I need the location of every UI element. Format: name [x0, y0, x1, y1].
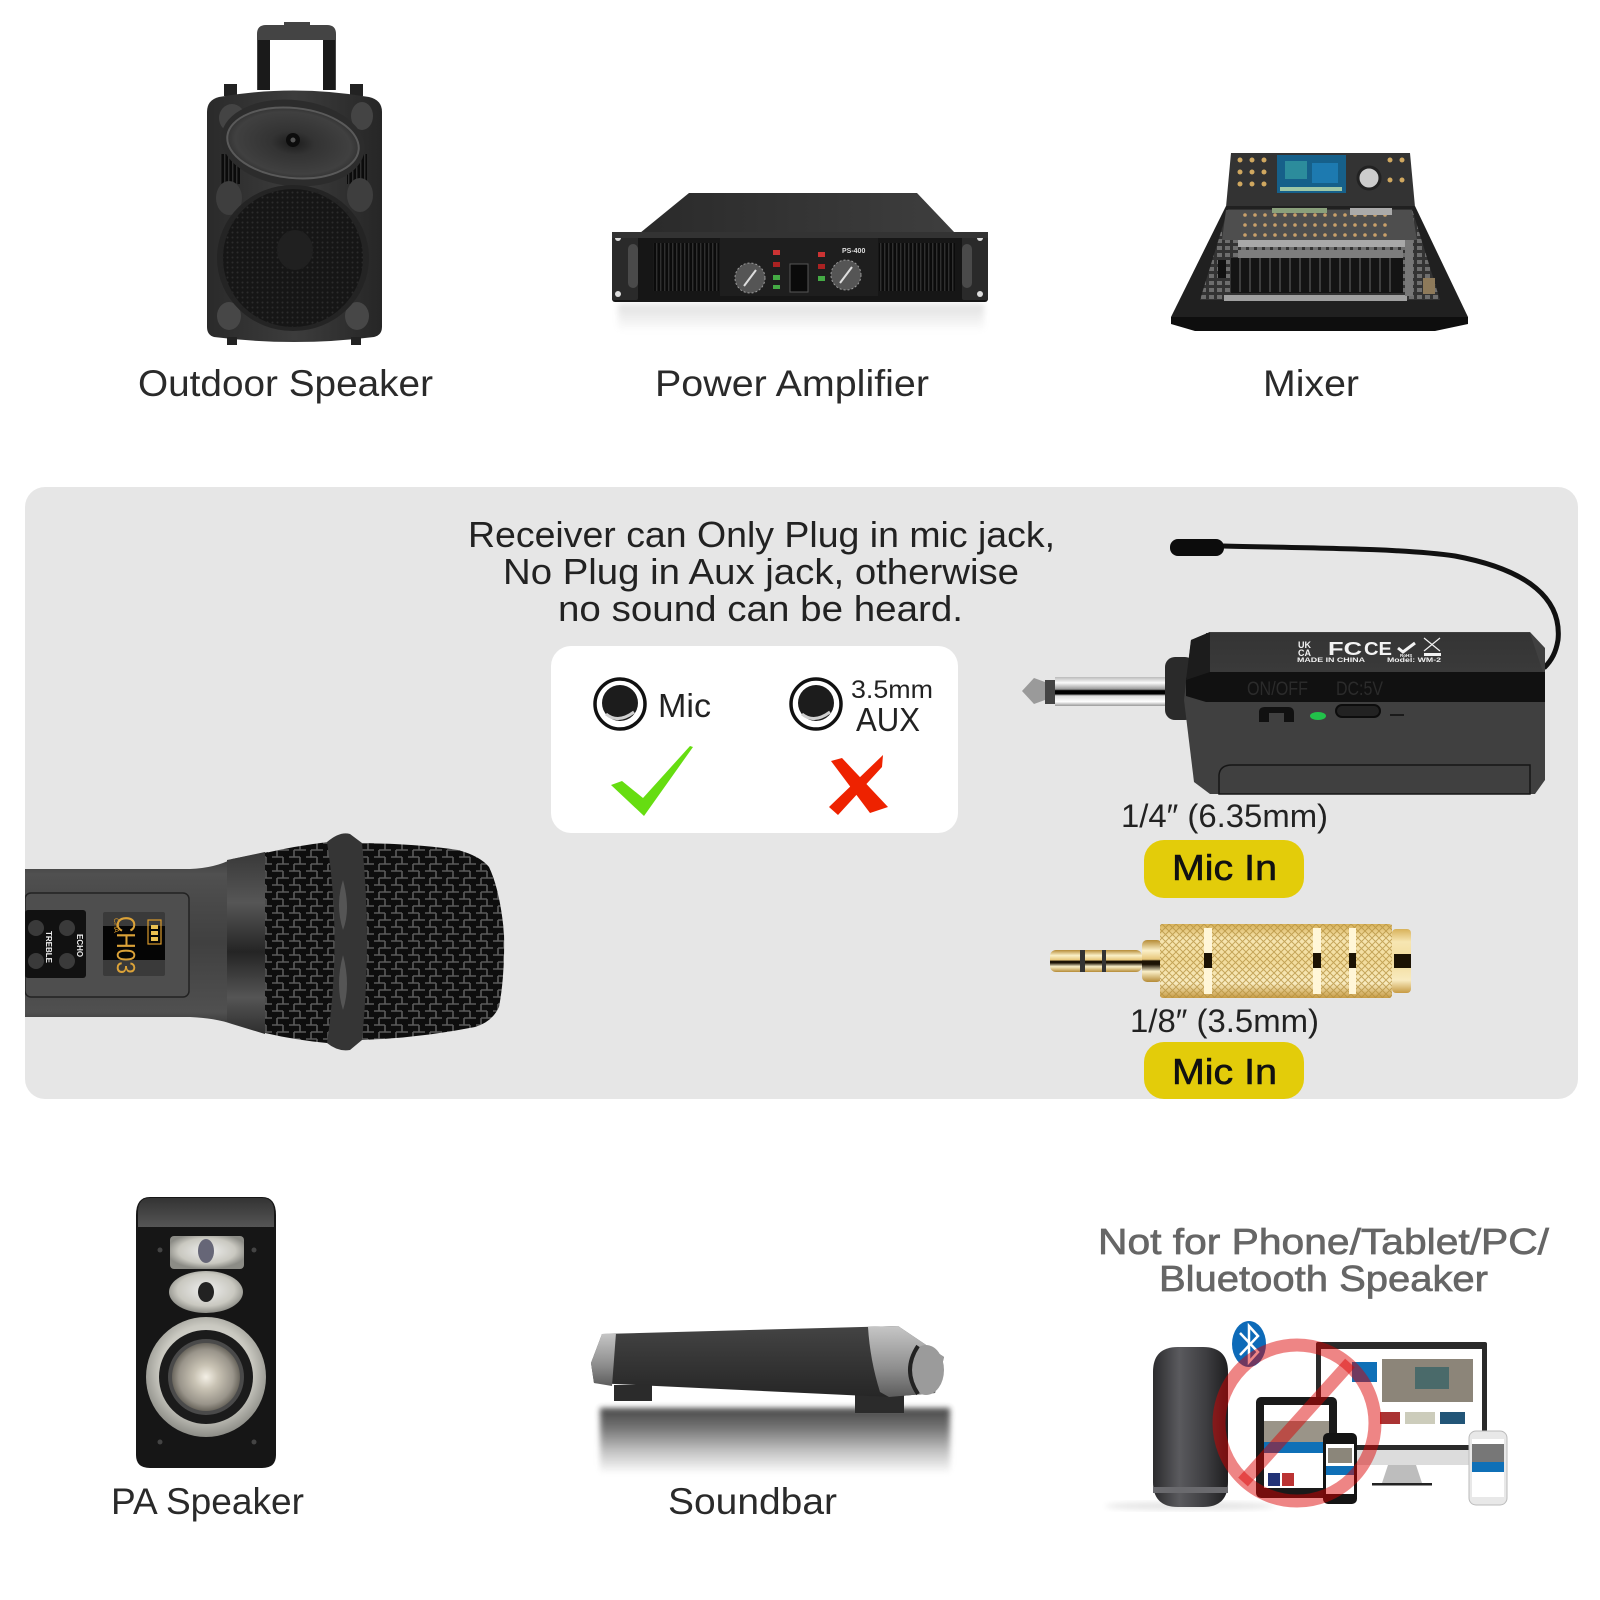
badge: mic in 1/8 — [1144, 1042, 1304, 1099]
control strip: TREBLE — [44, 931, 53, 964]
device: power amplifier — [612, 193, 988, 332]
white smartphone — [1469, 1431, 1507, 1505]
heading: plug warning: Receiver can Only Plug in mic jack, — [468, 514, 1055, 555]
LCD display: CH03 — [111, 916, 141, 974]
device: power amplifier: PS-400 — [842, 248, 865, 255]
microphone — [25, 833, 504, 1050]
certification marks: RoHS — [1400, 653, 1412, 658]
certification marks: FC — [1328, 639, 1362, 659]
heading: not for phone tablet pc — [1098, 1221, 1549, 1299]
heading: not for phone tablet pc: Bluetooth Speaker — [1159, 1258, 1488, 1299]
gold 3.5mm adapter — [1050, 924, 1411, 998]
certification marks: UK — [1298, 640, 1311, 650]
size label: 1/4 inch: 1/4″ (6.35mm) — [1121, 798, 1328, 834]
plug collar — [1165, 657, 1195, 720]
icon: bluetooth — [1232, 1321, 1266, 1367]
device: mixer — [1171, 153, 1468, 331]
icon: red cross — [829, 755, 888, 815]
incompatible devices group — [1105, 1321, 1507, 1510]
LCD display — [103, 912, 165, 976]
certification marks: MADE IN CHINA — [1297, 657, 1365, 664]
badge: mic in 1/8: Mic In — [1172, 1051, 1277, 1092]
badge: mic in 1/4: Mic In — [1172, 847, 1277, 888]
panel: receiver compatibility — [25, 487, 1578, 1099]
label: PA speaker: PA Speaker — [111, 1481, 304, 1522]
badge: mic in 1/4 — [1144, 840, 1304, 898]
heading: not for phone tablet pc: Not for Phone/Tablet/PC/ — [1098, 1221, 1549, 1262]
text: 3.5mm AUX: AUX — [856, 701, 920, 738]
icon: prohibition sign — [1219, 1345, 1375, 1501]
heading: plug warning: no sound can be heard. — [558, 588, 963, 629]
tablet — [1256, 1397, 1337, 1498]
status LED — [1310, 712, 1326, 720]
certification marks — [1297, 638, 1442, 664]
certification marks: Model: WM-2 — [1387, 657, 1442, 664]
quarter-inch plug — [1022, 677, 1167, 706]
device: outdoor speaker — [207, 22, 382, 345]
receiver body — [1184, 632, 1545, 794]
icon: mic jack — [595, 679, 645, 729]
device: soundbar — [591, 1326, 950, 1474]
grille — [265, 842, 504, 1043]
device: PA speaker — [136, 1197, 276, 1468]
certification marks: CE — [1364, 639, 1392, 659]
bluetooth speaker — [1105, 1347, 1275, 1510]
power switch — [1259, 707, 1294, 722]
icon: green check — [611, 746, 693, 816]
heading: plug warning: No Plug in Aux jack, otherwise — [503, 551, 1019, 592]
USB-C port — [1336, 705, 1380, 717]
antenna — [1170, 539, 1558, 668]
LCD display: CHA — [112, 918, 119, 933]
embossed labels: DC:5V — [1336, 679, 1383, 700]
text: Mic: Mic — [658, 687, 711, 724]
label: outdoor speaker: Outdoor Speaker — [138, 363, 433, 404]
control strip: ECHO — [75, 934, 84, 957]
monitor — [1316, 1342, 1487, 1486]
icon: aux jack — [791, 679, 841, 729]
label: soundbar: Soundbar — [668, 1481, 837, 1522]
certification marks: CA — [1298, 648, 1311, 658]
label: mixer: Mixer — [1263, 363, 1359, 404]
phone — [1323, 1433, 1357, 1504]
embossed labels — [1247, 679, 1383, 700]
text: 3.5mm AUX: 3.5mm — [851, 676, 933, 704]
label: power amplifier: Power Amplifier — [655, 363, 929, 404]
text: 3.5mm AUX — [851, 676, 933, 738]
control strip — [25, 910, 86, 978]
receiver — [1022, 539, 1558, 794]
size label: 1/8 inch: 1/8″ (3.5mm) — [1130, 1003, 1319, 1039]
heading: plug warning — [468, 514, 1055, 629]
embossed labels: ON/OFF — [1247, 679, 1308, 700]
card: jack comparison — [551, 646, 958, 833]
ring — [327, 833, 367, 1050]
